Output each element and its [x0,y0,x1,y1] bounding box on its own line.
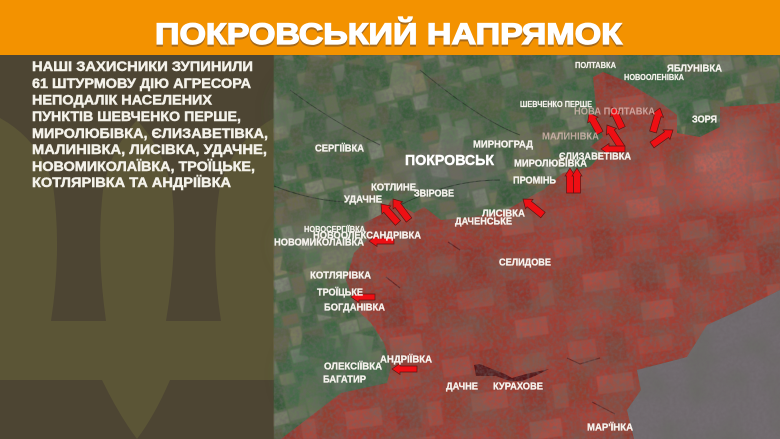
label: Yelyzavetivka: ЄЛИЗАВЕТІВКА [559,152,631,162]
label: Dachne: ДАЧНЕ [446,382,478,392]
dark ravines [386,242,615,414]
text block: summary: КОТЛЯРІВКА ТА АНДРІЇВКА [32,175,231,190]
arrow: Troitske [351,292,375,302]
text block: summary: 61 ШТУРМОВУ ДІЮ АГРЕСОРА [32,76,251,91]
label: Selydove: СЕЛИДОВЕ [499,258,551,268]
label: Pokrovsk: ПОКРОВСЬК [405,153,494,169]
label: Nova Poltavka: НОВА ПОЛТАВКА [574,106,655,118]
image grain [274,55,780,439]
map labels [274,60,722,434]
text block: summary: НОВОМИКОЛАЇВКА, ТРОЇЦЬКЕ, [32,159,255,174]
header band [0,0,780,55]
label: Zorya: ЗОРЯ [692,114,717,126]
arrow: Malynivka [602,122,627,151]
label: Novoserhiivka: НОВОСЕРГІЇВКА [304,224,365,234]
label: Zvirove: ЗВІРОВЕ [414,188,454,200]
label: Myrnohrad: МИРНОГРАД [473,140,533,150]
panel: satellite map [274,55,780,439]
label: Myroliubivka: МИРОЛЮБІВКА [514,158,587,170]
label: Novoolenivka: НОВООЛЕНІВКА [624,72,684,82]
panel: left text panel [0,55,274,439]
label: Kotliarivka: КОТЛЯРІВКА [310,270,371,282]
label: Lysivka: ЛИСІВКА [482,208,525,220]
text block: summary: НЕПОДАЛІК НАСЕЛЕНИХ [32,92,212,108]
arrow: Nova Poltavka [607,104,627,131]
label: Andriivka: АНДРІЇВКА [380,352,432,366]
label: Poltavka: ПОЛТАВКА [575,60,616,70]
arrows: attack directions [351,104,676,374]
label: Serhiivka: СЕРГІЇВКА [315,142,364,154]
label: Novooleksandrivka: НОВООЛЕКСАНДРІВКА [313,230,421,242]
arrow: Andriivka [392,364,417,374]
rivers [274,70,520,205]
image mottling [274,55,780,439]
arrow: Zorya [649,125,676,150]
label: Troitske: ТРОЇЦЬКЕ [317,286,363,298]
arrow: Lysivka [519,194,547,220]
text block: summary: НАШІ ЗАХИСНИКИ ЗУПИНИЛИ [32,59,253,74]
arrow: Kotlyne [388,195,414,224]
label: Novomykolaivka: НОВОМИКОЛАЇВКА [274,236,364,248]
arrow: Novoolenivka [647,106,666,134]
text block: summary: МАЛИНІВКА, ЛИСІВКА, УДАЧНЕ, [32,142,267,157]
label: Dachenske: ДАЧЕНСЬКЕ [455,216,512,228]
text block: summary [32,59,268,190]
label: Kurakhove: КУРАХОВЕ [493,382,543,392]
arrow: Shevchenko Pershe [584,110,605,136]
title: ПОКРОВСЬКИЙ НАПРЯМОК [155,17,623,51]
label: Oleksiivka: ОЛЕКСІЇВКА [324,360,382,372]
arrow: Myroliubivka left [565,168,575,193]
icon: trident emblem [0,118,274,439]
label: Kotlyne: КОТЛИНЕ [371,182,416,194]
label: Bohdanivka: БОГДАНІВКА [324,302,385,314]
reservoir [474,364,549,381]
grey urban area [627,290,780,439]
arrow: Yelyzavetivka [601,144,625,154]
arrow: Novomykolaivka [369,236,394,246]
label: Bahatyr: БАГАТИР [323,374,366,386]
arrow: Myroliubivka right [572,168,582,193]
label: Shevchenko Pershe: ШЕВЧЕНКО ПЕРШЕ [520,99,592,109]
text block: summary: ПУНКТІВ ШЕВЧЕНКО ПЕРШЕ, [32,109,241,124]
arrow: Udachne [377,200,402,227]
label: Malynivka: МАЛИНІВКА [542,132,599,142]
text block: summary: МИРОЛЮБІВКА, ЄЛИЗАВЕТІВКА, [32,126,268,141]
label: Yablunivka: ЯБЛУНІВКА [667,64,722,74]
occupied area [274,55,780,439]
label: Udachne: УДАЧНЕ [344,194,382,206]
label: Marinka: МАР'ЇНКА [587,420,633,434]
label: Promin: ПРОМІНЬ [513,176,556,186]
